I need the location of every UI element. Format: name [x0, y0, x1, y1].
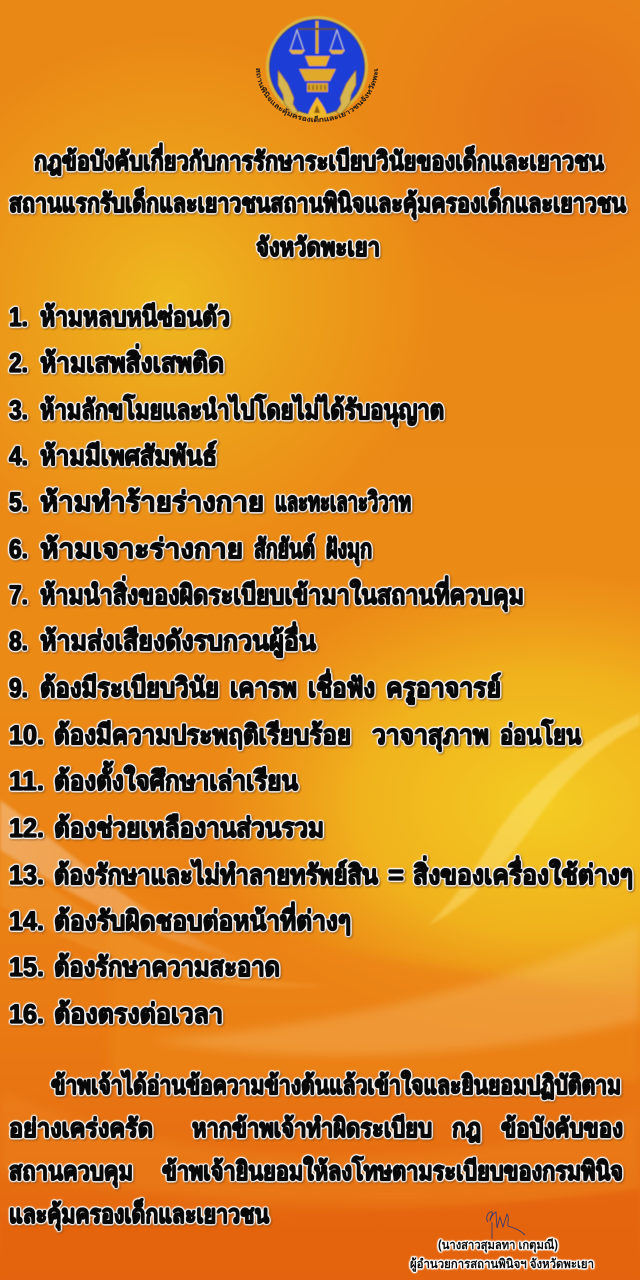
rules list: 14. — [9, 906, 44, 936]
rules list: 7. — [9, 580, 28, 610]
rules list: ต้องรับผิดชอบต่อหน้าที่ต่างๆ — [54, 901, 351, 936]
rules list: ต้องตรงต่อเวลา — [54, 999, 223, 1029]
rules list: 15. — [9, 952, 44, 982]
pledge paragraph: หากข้าพเจ้าทำผิดระเบียบ — [192, 1113, 432, 1143]
rules list: 10. — [9, 720, 44, 750]
rules list: ต้องมีระเบียบวินัย — [40, 673, 219, 703]
rules list: ต้องรักษาและไม่ทำลายทรัพย์สิน — [54, 859, 378, 890]
rules list: เชื่อฟัง — [308, 668, 375, 703]
signatory — [410, 1238, 594, 1272]
logo: department seal — [256, 16, 378, 122]
rules list: 1. — [9, 302, 28, 332]
pledge paragraph: กฎ — [452, 1113, 481, 1143]
rules list: ห้ามหลบหนีซ่อนตัว — [40, 302, 230, 332]
rules list: = — [388, 860, 404, 890]
rules list: ห้ามทำร้ายร่างกาย — [40, 487, 264, 517]
signature — [487, 1212, 525, 1239]
rules list: ห้ามมีเพศสัมพันธ์ — [40, 440, 217, 471]
rules list: 16. — [9, 999, 44, 1029]
rules list: ห้ามเจาะร่างกาย — [40, 534, 243, 564]
rules list: ห้ามส่งเสียงดังรบกวนผู้อื่น — [40, 621, 316, 658]
rules list: ห้ามเสพสิ่งเสพติด — [40, 343, 224, 378]
pledge paragraph: และคุ้มครองเด็กและเยาวชน — [9, 1198, 269, 1231]
rules list: 11. — [9, 766, 44, 796]
rules list: ห้ามนำสิ่งของผิดระเบียบเข้ามาในสถานที่ควบคุม — [40, 575, 524, 612]
rules list: สักยันต์ — [254, 533, 315, 564]
rules list: ครูอาจารย์ — [386, 672, 501, 705]
rules list: 12. — [9, 813, 44, 843]
rules list: 2. — [9, 348, 28, 378]
signatory: ผู้อำนวยการสถานพินิจฯ จังหวัดพะเยา — [410, 1257, 594, 1272]
rules list: ฝังมุก — [326, 534, 372, 566]
rules list: 3. — [9, 395, 28, 425]
rules list: 5. — [9, 487, 28, 517]
pledge paragraph: อย่างเคร่งครัด — [9, 1113, 153, 1143]
rules list: ต้องรักษาความสะอาด — [54, 952, 280, 982]
title — [9, 142, 626, 262]
pledge paragraph: สถานควบคุม — [9, 1156, 133, 1188]
rules list: อ่อนโยน — [500, 718, 581, 750]
rules list: ห้ามลักขโมยและนำไปโดยไม่ได้รับอนุญาต — [40, 393, 444, 427]
rules list: และทะเลาะวิวาท — [275, 487, 411, 517]
rules list: ต้องช่วยเหลืองานส่วนรวม — [54, 813, 324, 843]
rules list: 8. — [9, 626, 28, 656]
signatory: (นางสาวสุมลทา เกตุมณี) — [438, 1238, 558, 1253]
rules list: วาจาสุภาพ — [372, 720, 489, 752]
title: จังหวัดพะเยา — [256, 232, 380, 262]
pledge paragraph — [9, 1069, 623, 1231]
rules list: 6. — [9, 534, 28, 564]
rules list: 9. — [9, 673, 28, 703]
seal disc and emblem — [268, 18, 366, 118]
pledge paragraph: ข้อบังคับของ — [501, 1113, 623, 1143]
seal lettering — [256, 68, 378, 122]
rules list: เคารพ — [230, 673, 297, 703]
rules list: 13. — [9, 860, 44, 890]
rules list: ต้องมีความประพฤติเรียบร้อย — [54, 720, 351, 750]
rules list — [9, 302, 633, 1029]
rules list: ต้องตั้งใจศึกษาเล่าเรียน — [54, 760, 298, 796]
rules list: 4. — [9, 441, 28, 471]
